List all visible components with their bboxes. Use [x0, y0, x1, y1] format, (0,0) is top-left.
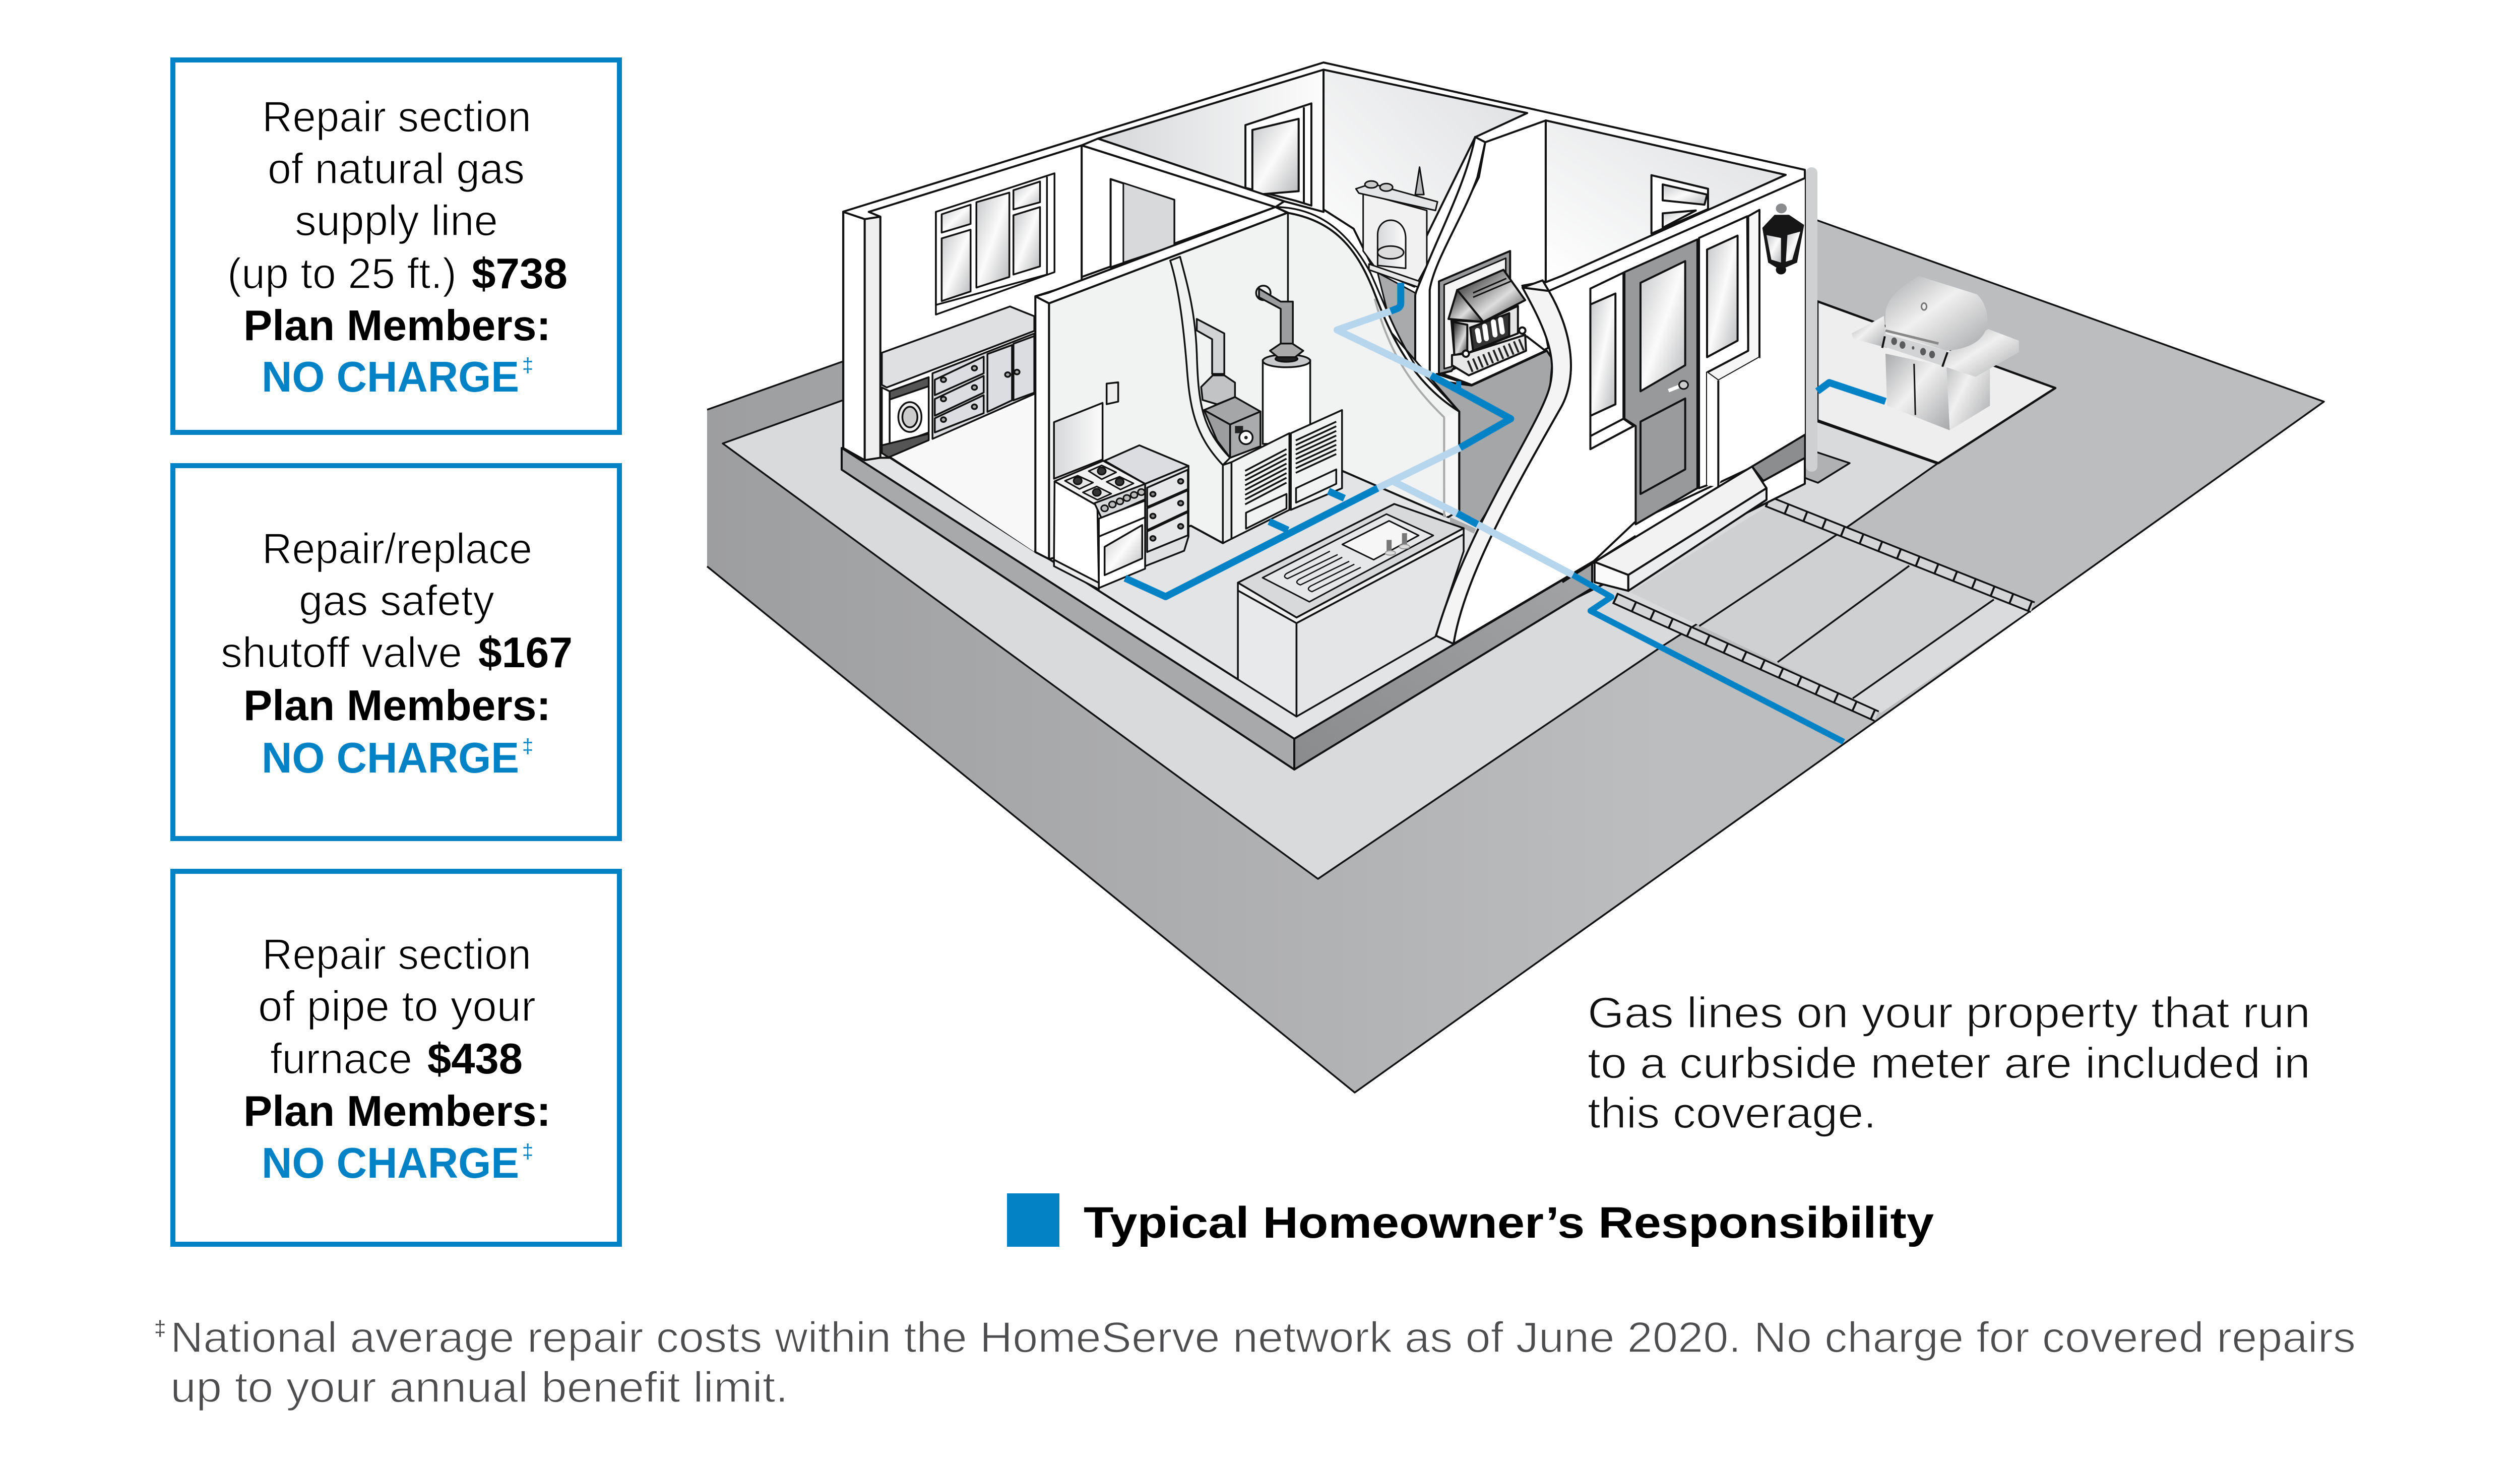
- text: curbside meter note: Gas lines on your property that run: [1588, 989, 2310, 1037]
- gas pipes: homeowner responsibility (blue lines): [1125, 283, 1844, 742]
- panel: gas safety shutoff valve repair: Plan Members:: [243, 682, 551, 730]
- ground: property lawn, paths and driveway: [707, 220, 2324, 1093]
- panel: gas safety shutoff valve repair: gas safety: [299, 577, 494, 625]
- panel: gas safety shutoff valve repair: NO CHARGE: [262, 734, 519, 782]
- icon: water heater: [1256, 286, 1310, 444]
- louvered utility closet doors: [1223, 410, 1342, 543]
- panel: natural gas supply line repair: ‡: [522, 354, 533, 376]
- panel: furnace pipe repair: NO CHARGE: [262, 1139, 519, 1187]
- panel: gas safety shutoff valve repair: Repair/replace: [262, 525, 532, 573]
- icon: gas fire: [1439, 251, 1526, 375]
- panel: natural gas supply line repair: [173, 60, 619, 432]
- house silhouette and wall tops: [843, 62, 1805, 605]
- panel: natural gas supply line repair: Plan Members:: [243, 302, 551, 350]
- icon: furnace: [1197, 319, 1261, 458]
- kitchen sink unit: [1238, 504, 1464, 717]
- panel: gas safety shutoff valve repair: ‡: [522, 735, 533, 757]
- left kitchen: wall, window and doorway: [843, 139, 1284, 552]
- panel: natural gas supply line repair: of natural gas: [268, 145, 525, 193]
- panel: gas safety shutoff valve repair: $167: [478, 629, 573, 677]
- panel: furnace pipe repair: [173, 871, 619, 1244]
- legend: typical homeowner's responsibility: Typical Homeowner’s Responsibility: [1084, 1198, 1934, 1247]
- footnote: [154, 1314, 2356, 1412]
- panel: gas safety shutoff valve repair: [173, 466, 619, 839]
- footnote: ‡: [154, 1316, 166, 1340]
- panel: natural gas supply line repair: $738: [472, 250, 568, 298]
- panel: furnace pipe repair: furnace: [270, 1035, 412, 1083]
- text: curbside meter note: [1588, 989, 2310, 1137]
- panel: gas safety shutoff valve repair: shutoff valve: [221, 629, 462, 677]
- right room wall, floor and gas fire: [1415, 120, 1553, 527]
- panel: furnace pipe repair: Repair section: [262, 931, 531, 979]
- house floor and foundation: [842, 353, 1613, 770]
- panel: furnace pipe repair: of pipe to your: [258, 983, 536, 1031]
- icon: gas grill: [1852, 276, 2019, 430]
- panel: natural gas supply line repair: (up to 25 ft.): [227, 250, 457, 298]
- panel: furnace pipe repair: Plan Members:: [243, 1088, 551, 1135]
- text: curbside meter note: to a curbside meter are included in: [1588, 1039, 2310, 1088]
- right wing interior wall with rear door: [1546, 120, 1786, 282]
- panel: natural gas supply line repair: NO CHARGE: [262, 353, 519, 401]
- front wall with curved cutaway: [1436, 178, 1806, 644]
- text: curbside meter note: this coverage.: [1588, 1089, 1876, 1137]
- icon: wall lantern: [1762, 204, 1804, 275]
- central partition wall with curved cutaway: [1035, 207, 1476, 559]
- panel: natural gas supply line repair: supply line: [295, 197, 498, 245]
- panel: furnace pipe repair: $438: [427, 1035, 523, 1083]
- window: [936, 173, 1054, 314]
- back room walls and door: [1098, 70, 1527, 287]
- kitchen counter, cabinets and washer: [882, 306, 1034, 458]
- front door, windows and entry step: [1562, 210, 1805, 591]
- mantel fireplace and back room floor: [1356, 167, 1437, 365]
- icon: washing machine: [882, 377, 929, 458]
- footnote: National average repair costs within the HomeServe network as of June 2020. No charge for covered repairs: [170, 1314, 2356, 1362]
- gas stove and side cabinet: [1054, 382, 1188, 589]
- panel: furnace pipe repair: ‡: [522, 1140, 533, 1163]
- house cutaway illustration: [842, 62, 2019, 770]
- footnote: up to your annual benefit limit.: [170, 1364, 788, 1412]
- meter pole: [1806, 167, 1817, 472]
- furnace and water heater: [1170, 257, 1342, 543]
- gas pipe to grill: [1817, 382, 1885, 402]
- panel: natural gas supply line repair: Repair section: [262, 93, 531, 141]
